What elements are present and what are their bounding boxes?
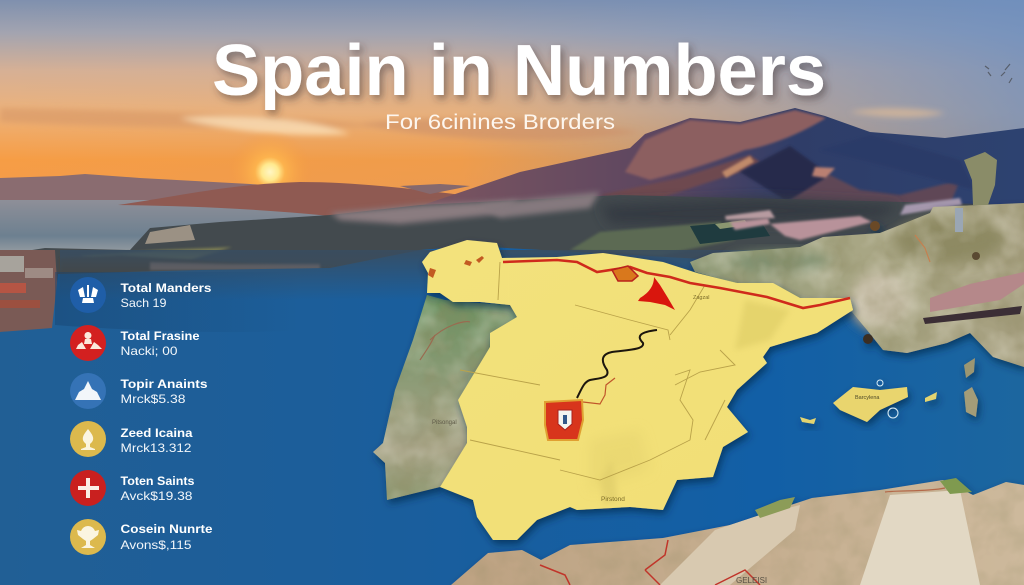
map land: Portugal — [373, 295, 518, 500]
north-west marks — [428, 256, 484, 278]
legend: stat 1: Sach 19 — [120, 296, 167, 310]
label: region name: GELEISI — [736, 576, 767, 585]
legend: stat 3: Mrck$5.38 — [120, 392, 186, 406]
map land: northern island — [964, 152, 997, 205]
legend: stat 6 — [70, 519, 213, 555]
legend: stat 5: Avck$19.38 — [120, 489, 193, 503]
river — [577, 330, 657, 398]
sun — [228, 130, 312, 214]
background: mountain range — [420, 108, 1024, 240]
legend: stat 4 — [70, 421, 193, 457]
haze over the upper sea — [60, 250, 760, 300]
subtitle: For 6cinines Brorders — [385, 111, 615, 134]
map land: France and Italy — [690, 203, 1024, 367]
legend: stat 3: Topir Anaints — [120, 377, 208, 391]
label: Portugal place name: Pitsongal — [432, 420, 457, 426]
legend backing panel — [55, 272, 300, 332]
legend: stat 3 — [70, 373, 208, 409]
label: place name south: Pirstond — [601, 496, 625, 503]
legend: stat 6: Avons$,115 — [120, 538, 192, 552]
legend: stat 2: Total Frasine — [120, 329, 200, 343]
legend: stat 6: Cosein Nunrte — [120, 522, 213, 536]
orange region — [612, 266, 638, 281]
label: place name east: Zagzal — [693, 295, 710, 301]
roads on Spain map — [460, 262, 735, 480]
legend: stat 1: Total Manders — [120, 281, 212, 295]
background: sunset sky — [0, 0, 1024, 235]
legend: stat 5: Toten Saints — [120, 474, 195, 488]
map land: Spain — [422, 240, 853, 540]
northern red border line — [503, 260, 850, 308]
background: coastal town and farmland — [0, 192, 1024, 332]
map land: North Africa — [451, 478, 1024, 585]
legend: stat 4: Mrck13.312 — [120, 441, 192, 455]
coat of arms — [545, 400, 583, 440]
legend: stat 1 — [70, 277, 212, 313]
background: sea — [0, 246, 1024, 585]
legend: stat 2: Nacki; 00 — [120, 344, 178, 358]
legend: stat 2 — [70, 325, 200, 361]
background: distant hills and bay — [0, 174, 520, 260]
legend: stat 5 — [70, 470, 195, 506]
red region — [638, 277, 675, 310]
map land: Balearic islands — [800, 358, 978, 424]
legend: stat 4: Zeed Icaina — [120, 426, 193, 440]
title: Spain in Numbers — [212, 31, 826, 111]
label: island name: Barcylena — [855, 395, 880, 401]
